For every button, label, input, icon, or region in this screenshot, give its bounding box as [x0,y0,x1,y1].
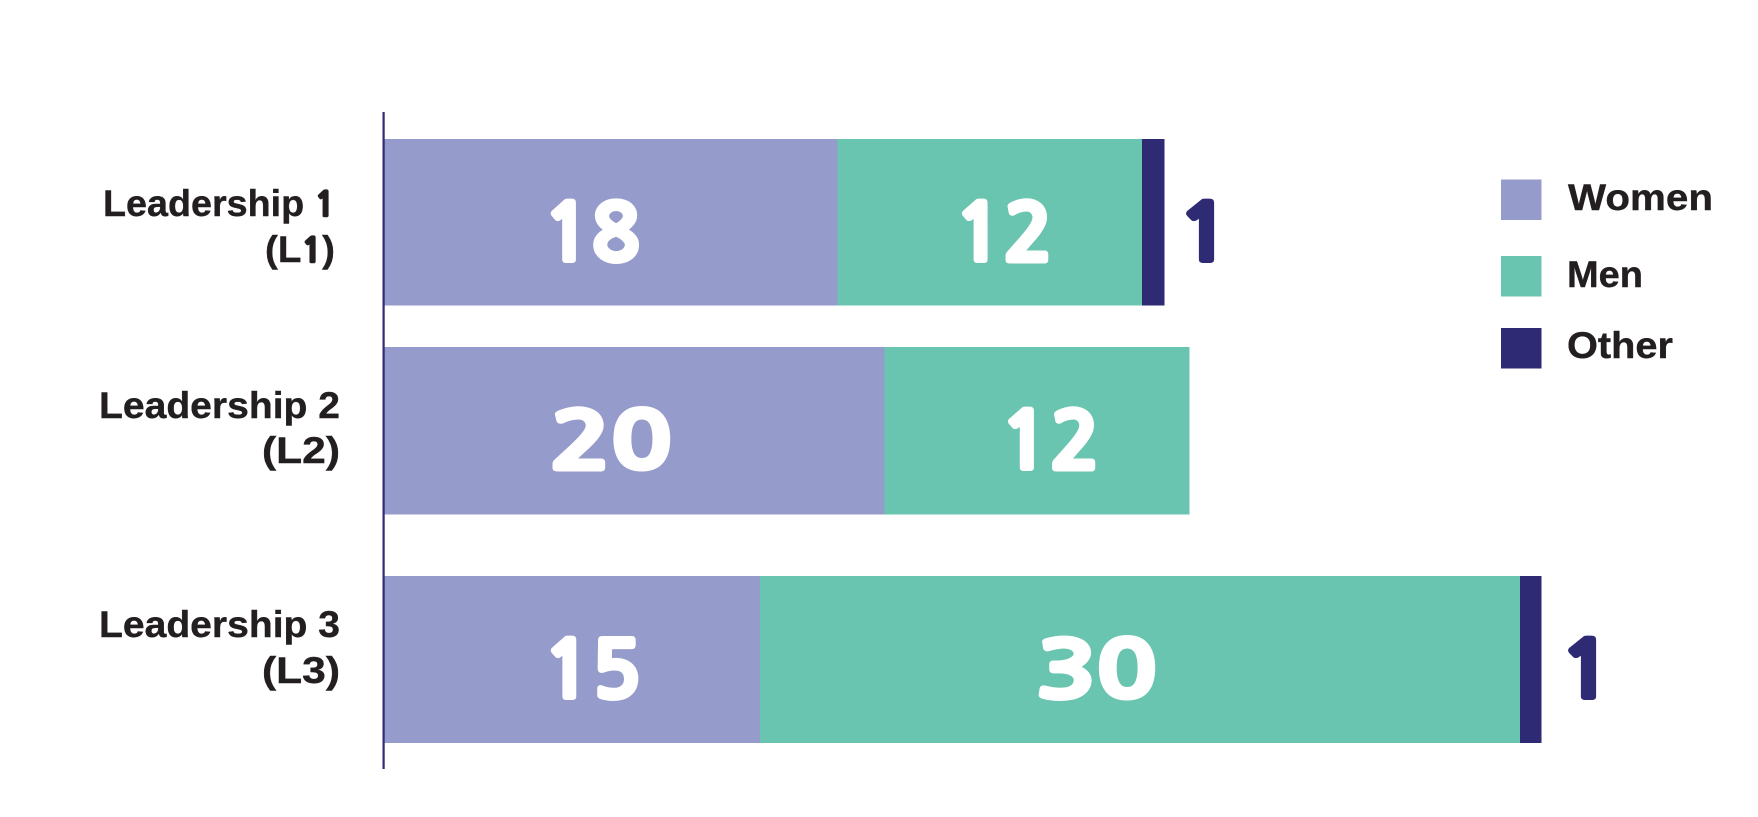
legend item: Men [1501,254,1643,296]
value: other 1: 1 [1560,632,1614,710]
bar: other [1142,139,1164,306]
bar: men 12 [884,347,1190,514]
bar: men 12: 12 [1000,402,1100,480]
label: Leadership 1 (L1): (L1) [265,229,335,270]
legend [1501,177,1713,368]
bar: men 30 [760,576,1520,743]
bar: other [1520,576,1542,743]
bar: women 20: 20 [550,402,672,480]
label: Leadership 1 (L1): Leadership 1 [103,183,335,224]
label: Leadership 2 (L2): Leadership 2 [99,385,340,426]
row: Leadership 1 [103,139,1232,306]
label: Leadership 3 (L3) [99,604,340,691]
bar: men 12: 12 [954,194,1053,272]
row: Leadership 3 [99,576,1614,743]
legend item: Women [1501,177,1713,220]
bar: women 15 [384,576,760,743]
legend item: Other: Other [1567,325,1673,366]
bar: women 18: 18 [543,194,640,272]
bar: men 30: 30 [1036,632,1157,710]
label: Leadership 3 (L3): Leadership 3 [99,604,340,645]
bar: women 15: 15 [543,632,641,710]
bar: men 12 [838,139,1142,306]
bar: women 18 [384,139,838,306]
legend item: Other [1501,325,1673,368]
label: Leadership 3 (L3): (L3) [262,650,340,691]
legend item: Women: Women [1568,177,1713,218]
axis line [382,112,385,769]
row: Leadership 2 [99,347,1190,514]
label: Leadership 2 (L2) [99,385,340,471]
label: Leadership 2 (L2): (L2) [262,430,340,471]
legend item: Men: Men [1567,254,1643,295]
value: other 1: 1 [1178,194,1232,272]
bar: women 20 [384,347,884,514]
label: Leadership 1 (L1) [103,183,335,270]
